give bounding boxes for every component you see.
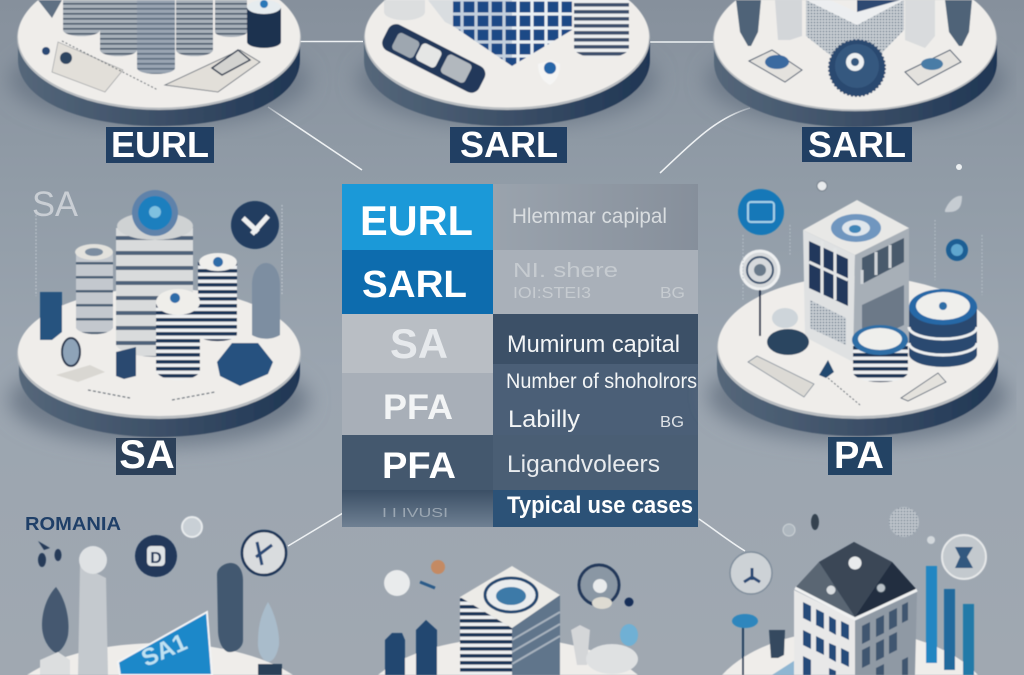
row: SA: Mumirum capital xyxy=(507,331,680,358)
icon: bottom cards xyxy=(748,356,946,405)
label: PA: PA xyxy=(834,435,884,477)
icon: small beads xyxy=(783,514,935,544)
row: PFA light: Labilly xyxy=(508,406,580,433)
row: SARL: SARL xyxy=(362,264,467,306)
icon: striped tower xyxy=(460,566,560,675)
icon: coin stacks xyxy=(38,0,281,74)
panel: PA platform xyxy=(708,181,1008,442)
icon: right card xyxy=(905,50,961,85)
icon: dark posts xyxy=(385,620,437,675)
row: SA xyxy=(342,314,698,373)
icon: white pile xyxy=(586,644,638,674)
panel: SA platform xyxy=(9,190,309,446)
icon: white ball xyxy=(384,570,435,596)
icon: ring xyxy=(579,565,619,609)
icon: dotted blob xyxy=(889,507,919,537)
icon: dark disc xyxy=(135,535,177,577)
icon: central tower xyxy=(116,212,193,357)
icon: drops xyxy=(38,541,62,567)
icon: dark leaf xyxy=(42,587,68,653)
icon: bullet xyxy=(252,263,280,339)
row: PFA dark xyxy=(342,435,698,490)
panel: comparison table xyxy=(342,184,698,527)
icon: white bottle xyxy=(571,625,590,665)
icon: left card xyxy=(749,50,802,82)
icon: blue gem xyxy=(217,343,273,386)
icon: striped coin stack xyxy=(574,0,629,58)
icon: ringed badge xyxy=(942,535,986,579)
icon: dark cup xyxy=(769,630,785,658)
row: typical use cases: Typical use cases xyxy=(507,492,693,519)
row: SARL: IOI:STEI3 xyxy=(513,285,591,302)
icon: knit object xyxy=(767,308,809,355)
icon: tall white tower xyxy=(78,546,108,675)
icon: base xyxy=(40,652,70,675)
icon: blue badge xyxy=(738,189,784,235)
row: EURL: EURL xyxy=(360,197,473,244)
icon: blue blob xyxy=(620,624,638,646)
row: PFA dark: PFA xyxy=(382,445,456,486)
icon: front coin stack xyxy=(852,325,908,382)
row: PFA light: PFA xyxy=(383,388,453,427)
decorative dot xyxy=(956,164,962,170)
panel: SARL platform centre xyxy=(357,0,657,126)
icon: light leaf xyxy=(258,602,282,675)
icon: gear xyxy=(829,40,885,96)
icon: ringed circle xyxy=(242,531,286,575)
panel: bottom left platform xyxy=(27,517,293,675)
icon: building xyxy=(803,200,909,362)
connector lines xyxy=(268,42,750,551)
icon: small blue dot xyxy=(946,239,968,261)
icon: right coin stack xyxy=(909,289,977,367)
icon: dark capsule xyxy=(217,563,243,652)
icon: pillars xyxy=(736,0,972,48)
icon: floating white bead xyxy=(817,181,827,191)
icon: orange dot xyxy=(431,560,445,574)
row: PFA light: Number of shoholrors xyxy=(506,370,697,393)
icon: white bead xyxy=(182,517,202,537)
row: PFA light xyxy=(342,364,698,435)
row: typical use cases xyxy=(342,490,698,527)
icon: dotted building base xyxy=(806,0,904,55)
label: SARL right: SARL xyxy=(808,124,906,165)
icon: laptop xyxy=(118,612,212,675)
panel: EURL platform xyxy=(9,0,309,126)
icon: roofed building xyxy=(794,542,917,675)
icon: blue oval sign xyxy=(732,614,758,675)
icon: sign circle xyxy=(730,552,772,594)
panel: bottom centre platform xyxy=(378,560,638,675)
caption lines xyxy=(88,390,215,400)
icon: dark tab xyxy=(40,292,62,340)
icon: document xyxy=(116,347,136,379)
row: PFA dark: Ligandvoleers xyxy=(507,451,660,478)
label: SARL centre: SARL xyxy=(460,124,558,165)
icon: documents xyxy=(42,41,260,92)
icon: blue sheet xyxy=(772,657,800,675)
label: EURL: EURL xyxy=(111,124,209,165)
label: ROMANIA: ROMANIA xyxy=(25,514,121,534)
row: SARL: NI. shere xyxy=(513,260,618,282)
icon: shield xyxy=(538,60,560,85)
row: SARL xyxy=(342,250,698,314)
label: SA: SA xyxy=(119,433,175,477)
icon: document pill xyxy=(379,21,488,96)
panel: bottom right platform xyxy=(722,507,986,675)
row: PFA light: BG xyxy=(660,414,684,431)
panel: SARL platform right xyxy=(706,0,1006,127)
icon: laptop: SA1 xyxy=(137,629,191,672)
icon: dark disc: D xyxy=(150,550,162,567)
heading: floating SA: SA xyxy=(32,185,79,224)
row: typical use cases: I I IVUSI xyxy=(382,505,448,520)
row: SA: SA xyxy=(390,320,448,367)
dark icon circle xyxy=(231,201,279,249)
icon: floating glass shape xyxy=(945,196,962,212)
icon: blue office tower xyxy=(428,0,572,66)
icon: ring sign xyxy=(741,251,779,336)
row: EURL xyxy=(342,184,698,250)
icon: gray tower xyxy=(75,244,113,334)
icon: front striped stack xyxy=(156,289,200,380)
icon: medal xyxy=(56,338,105,382)
icon: small cylinder xyxy=(384,0,425,20)
chart: blue bars xyxy=(926,566,974,675)
row: SARL: BG xyxy=(660,285,685,302)
icon: right striped tower xyxy=(198,253,237,341)
icon: top badge xyxy=(132,190,178,236)
icon: navy drop xyxy=(624,598,634,606)
row: EURL: Hlemmar capipal xyxy=(512,205,667,228)
